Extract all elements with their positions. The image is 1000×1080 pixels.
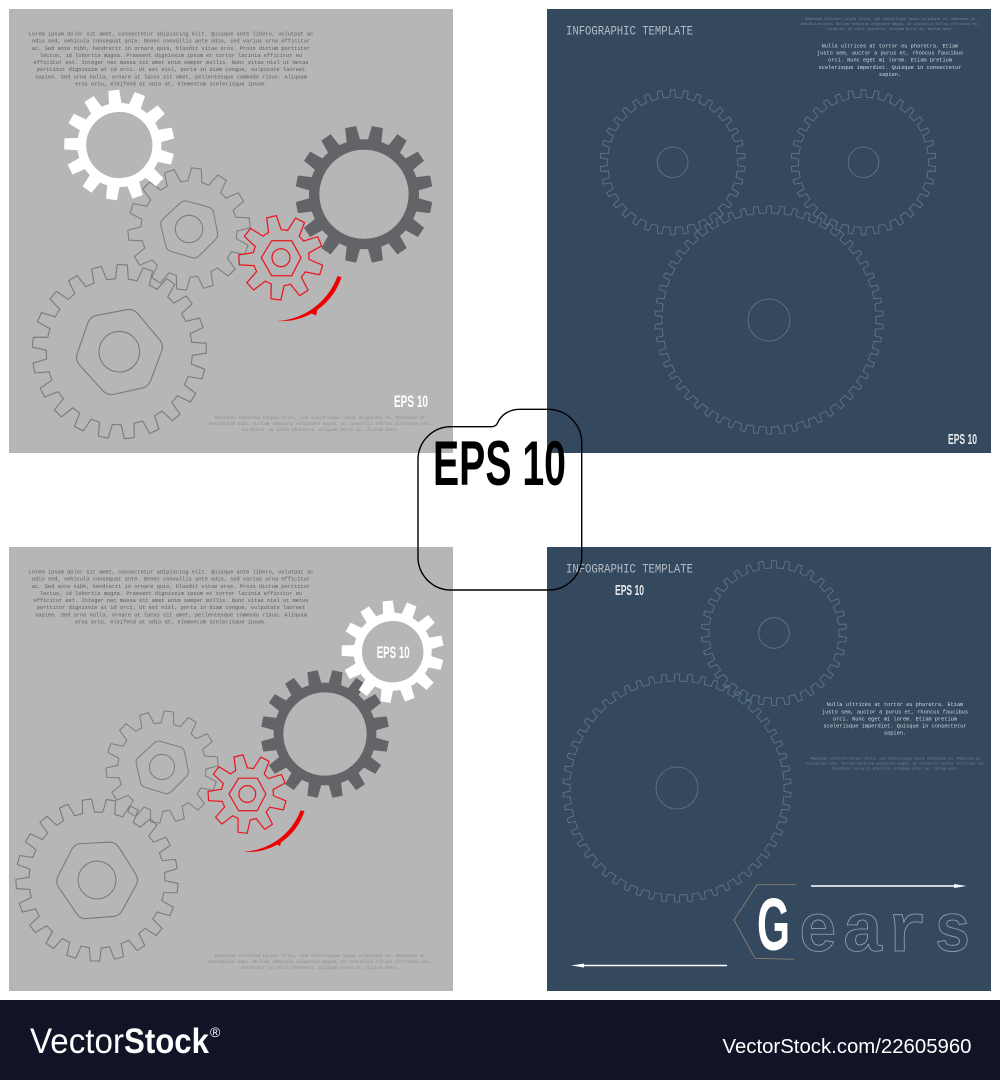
- footnote text: Curabitur eu velit pharetra, aliquam purus ac, dictum ante.: [241, 965, 399, 971]
- body text block: [822, 702, 968, 737]
- intro text block: porttitor dignissim at id orci. Ut est nisl, porta in diam congue, vulputate laoreet: [37, 605, 305, 611]
- intro text block: eros arcu, eleifend at odio at, elementum scelerisque ipsum.: [75, 81, 267, 87]
- panel: top-left grey: [9, 9, 453, 453]
- small text block: vestibulum nunc. Nullam vehicula vulputate magna, ac convallis tellus ultricies vel.: [799, 22, 981, 27]
- logo: Gears wordmark: [734, 883, 971, 972]
- body text block: Nulla ultrices at tortor eu pharetra. Etiam: [827, 702, 963, 708]
- arrow: top right: [811, 884, 966, 888]
- logo: registered mark: ®: [210, 1024, 221, 1040]
- body text block: justo sem, auctor a purus et, rhoncus faucibus: [817, 51, 963, 57]
- footnote text: [208, 415, 432, 433]
- logo: Gears wordmark: e: [799, 894, 837, 972]
- label: EPS 10: EPS 10: [394, 393, 428, 411]
- gear: blue right: [791, 90, 936, 235]
- gear: red outline: [200, 747, 295, 842]
- logo: VectorStock: Vector: [30, 1022, 124, 1061]
- intro text block: ac. Sed ante nibh, hendrerit in ornare quis, blandit vitae eros. Proin dictum porttitor: [32, 46, 310, 52]
- footnote text: [208, 953, 432, 971]
- label: EPS 10: EPS 10: [377, 644, 410, 662]
- panel: top-right blue: [547, 9, 991, 459]
- small text block: vestibulum nunc. Nullam vehicula vulputate magna, ac convallis tellus ultricies vel.: [805, 762, 986, 767]
- body text block: scelerisque imperdiet. Quisque in consectetur: [823, 724, 967, 730]
- body text block: [817, 44, 963, 78]
- intro text block: [29, 32, 313, 87]
- intro text block: eros arcu, eleifend at odio at, elementum scelerisque ipsum.: [75, 619, 267, 625]
- intro text block: porttitor dignissim at id orci. Ut est nisl, porta in diam congue, vulputate laoreet: [37, 67, 305, 73]
- body text block: orci. Nunc eget mi lorem. Etiam pretium: [833, 716, 957, 722]
- intro text block: lectus, id lobortis magna. Praesent dignissim ipsum et tortor lacinia efficitur eu: [40, 591, 302, 597]
- panel: bottom-left grey: [3, 547, 453, 991]
- gear: blue left: [600, 90, 745, 235]
- gear: large grey outline: [3, 786, 191, 975]
- logo: VectorStock bold part: Stock: [124, 1022, 209, 1061]
- intro text block: [29, 570, 313, 625]
- small text block: [799, 17, 981, 32]
- logo: Gears wordmark: G: [757, 883, 790, 966]
- gear: medium grey outline: [120, 161, 258, 297]
- intro text block: Lorem ipsum dolor sit amet, consectetur adipiscing elit. Quisque ante libero, volutpat ac: [29, 32, 313, 38]
- gear: white with label: [337, 596, 449, 707]
- body text block: orci. Nunc eget mi lorem. Etiam pretium: [828, 58, 952, 64]
- intro text block: sapien. Sed urna nulla, ornare ut lacus sit amet, pellentesque commodo risus. Aliquam: [35, 612, 307, 618]
- gear: white: [59, 85, 180, 205]
- small text block: Maecenas eleifend turpis felis, sed scelerisque lacus vulputate eu. Maecenas at: [810, 756, 981, 762]
- gear: large grey outline: [29, 262, 210, 442]
- intro text block: sapien. Sed urna nulla, ornare ut lacus sit amet, pellentesque commodo risus. Aliquam: [35, 74, 307, 80]
- body text block: sapien.: [879, 72, 901, 78]
- small text block: Maecenas eleifend turpis felis, sed scelerisque lacus vulputate eu. Maecenas at: [805, 17, 975, 22]
- arrow: bottom left: [571, 964, 727, 968]
- callout: EPS 10 badge: EPS 10: [433, 429, 566, 499]
- panel: bottom-right blue: [531, 547, 991, 991]
- intro text block: Lorem ipsum dolor sit amet, consectetur adipiscing elit. Quisque ante libero, volutpat ac: [29, 570, 313, 576]
- arrow: red curved: [277, 276, 342, 321]
- small text block: [805, 756, 986, 772]
- logo: Gears wordmark: a: [842, 894, 884, 972]
- intro text block: odio sed, vehicula consequat ante. Donec convallis ante odio, sed varius urna efficitur: [32, 39, 310, 45]
- footer url: VectorStock.com/22605960: [722, 1036, 972, 1058]
- gear: blue large: [531, 649, 823, 927]
- arrow: red curved: [244, 810, 304, 852]
- footnote text: Maecenas eleifend turpis felis, sed scelerisque lacus vulputate eu. Maecenas at: [215, 953, 426, 959]
- label: EPS 10: EPS 10: [948, 432, 977, 448]
- label: EPS 10: EPS 10: [615, 583, 644, 599]
- body text block: scelerisque imperdiet. Quisque in consectetur: [818, 65, 962, 71]
- heading: INFOGRAPHIC TEMPLATE: [566, 24, 693, 39]
- gear: dark grey: [283, 114, 445, 275]
- intro text block: ac. Sed ante nibh, hendrerit in ornare quis, blandit vitae eros. Proin dictum porttitor: [32, 584, 310, 590]
- intro text block: efficitur est. Integer nec massa sit amet enim semper mollis. Nunc vitae nisl ut metus: [34, 598, 308, 604]
- footnote text: Curabitur eu velit pharetra, aliquam purus ac, dictum ante.: [241, 427, 399, 433]
- footnote text: vestibulum nunc. Nullam vehicula vulputate magna, ac convallis tellus ultricies vel.: [208, 959, 432, 965]
- small text block: Curabitur eu velit pharetra, aliquam purus ac, dictum ante.: [826, 27, 954, 32]
- gear: blue small: [701, 560, 847, 706]
- body text block: Nulla ultrices at tortor eu pharetra. Etiam: [822, 44, 958, 50]
- small text block: Curabitur eu velit pharetra, aliquam purus ac, dictum ante.: [832, 767, 959, 772]
- footnote text: vestibulum nunc. Nullam vehicula vulputate magna, ac convallis tellus ultricies vel.: [208, 421, 432, 427]
- body text block: sapien.: [884, 731, 906, 737]
- intro text block: lectus, id lobortis magna. Praesent dignissim ipsum et tortor lacinia efficitur eu: [40, 53, 302, 59]
- logo: Gears wordmark: s: [934, 894, 971, 972]
- intro text block: efficitur est. Integer nec massa sit amet enim semper mollis. Nunc vitae nisl ut metus: [34, 60, 308, 66]
- gear: red outline: [230, 207, 333, 309]
- logo: Gears wordmark: r: [887, 894, 927, 972]
- footer bar: [0, 1000, 1000, 1080]
- callout: EPS 10 badge: [418, 409, 582, 590]
- footnote text: Maecenas eleifend turpis felis, sed scelerisque lacus vulputate eu. Maecenas at: [215, 415, 426, 421]
- gear: medium grey outline: [99, 705, 225, 829]
- body text block: justo sem, auctor a purus et, rhoncus faucibus: [822, 709, 968, 715]
- gear: dark grey: [250, 659, 400, 809]
- intro text block: odio sed, vehicula consequat ante. Donec convallis ante odio, sed varius urna efficitur: [32, 577, 310, 583]
- heading: INFOGRAPHIC TEMPLATE: [566, 562, 693, 577]
- gear: blue large: [623, 181, 915, 459]
